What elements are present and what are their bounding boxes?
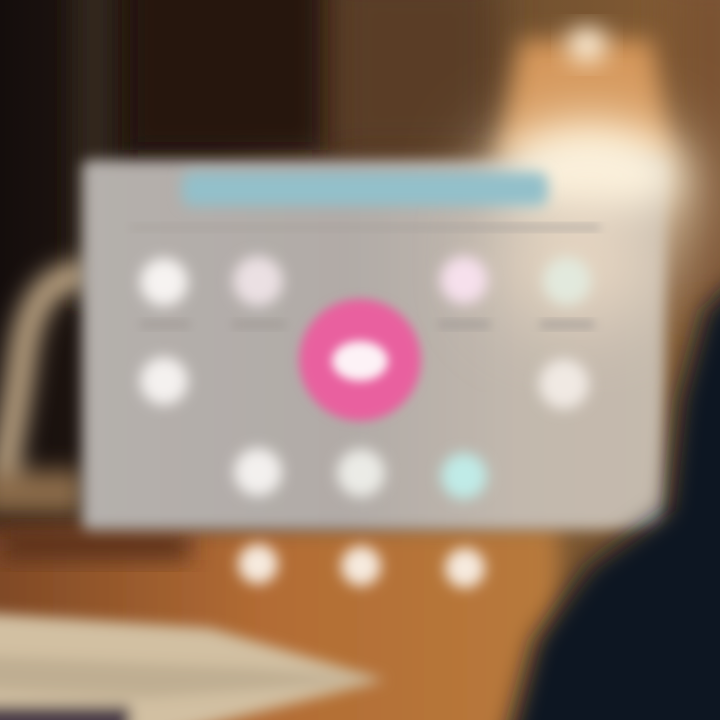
label smudge row 1 [140,320,594,329]
icon: circle row 1, 4 [440,256,488,304]
glow behind panel [490,130,690,250]
icon: circle row 3, 1 [234,448,282,496]
icon: circle row 2, right [539,359,589,409]
icon: circles below panel [238,544,485,588]
icon: circle row 1, 5 [543,257,591,305]
icon: circle row 2, left [140,357,188,405]
lamp [498,28,672,160]
icon: circle row 3, 2 [337,449,385,497]
stack of papers [0,612,385,720]
subtitle line [130,224,600,231]
dashboard panel [82,133,680,530]
dark silhouette of person [505,270,720,720]
icon: circle row 1, 2 [233,256,283,306]
icon: circle row 1, 1 [140,258,188,306]
central pink icon [299,299,421,421]
icon: circle row 3, 3 teal [441,453,487,499]
left lamp arm [0,275,90,515]
title bar [182,172,548,206]
desk [0,525,560,720]
